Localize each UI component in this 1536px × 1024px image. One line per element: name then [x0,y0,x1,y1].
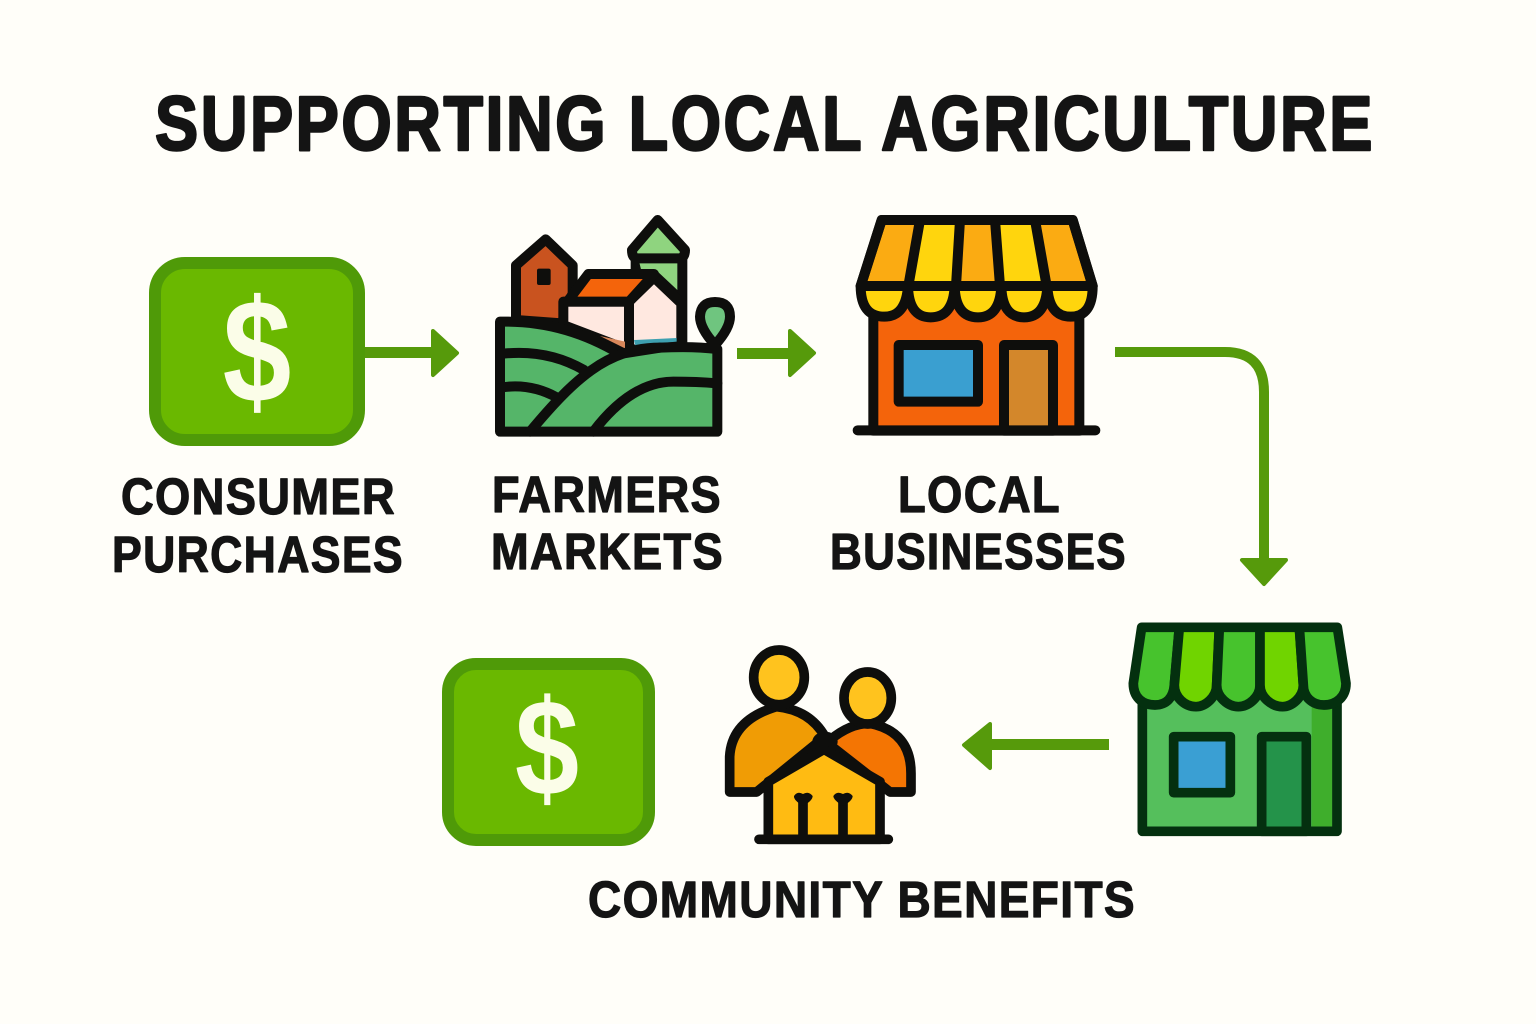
icon: community dollar tile [448,664,649,840]
label: consumer purchases: CONSUMER [121,468,396,525]
door [1004,345,1053,431]
barn [516,239,573,323]
tree [700,302,730,345]
icon: farm [500,220,730,432]
label: community benefits: COMMUNITY BENEFITS [588,871,1136,928]
label: local businesses: LOCAL [898,466,1061,523]
right person [830,672,911,792]
barn window [537,269,551,285]
left person [730,650,825,792]
silo [632,220,685,343]
house [759,749,888,839]
arrow: green shop to community [964,724,1109,768]
base line [858,415,1095,445]
joined hands [812,732,838,752]
field [500,322,717,432]
label: farmers markets [491,466,724,580]
window [899,345,978,402]
icon: community people and house [730,650,911,839]
arrow: purchases to farmers markets [365,331,457,375]
shop wall [873,307,1079,431]
icon: community dollar tile: $ [515,670,579,824]
label: farmers markets: MARKETS [491,523,724,580]
label: consumer purchases [112,468,404,583]
icon: green shop [1133,627,1346,831]
label: farmers markets: FARMERS [492,466,722,523]
icon: consumer purchases dollar tile: $ [223,269,291,433]
shop wall [1142,700,1337,831]
window [1174,737,1230,793]
arrow: farmers markets to local businesses [737,331,814,375]
label: local businesses [830,466,1127,580]
icon: consumer purchases dollar tile [155,263,359,440]
farmhouse [563,274,681,350]
label: local businesses: BUSINESSES [830,523,1127,580]
awning [861,220,1093,317]
door [1262,737,1306,831]
label: consumer purchases: PURCHASES [112,526,404,583]
arrow: local businesses down to green shop [1115,352,1286,584]
icon: local business shop [858,220,1095,431]
awning [1133,627,1346,707]
